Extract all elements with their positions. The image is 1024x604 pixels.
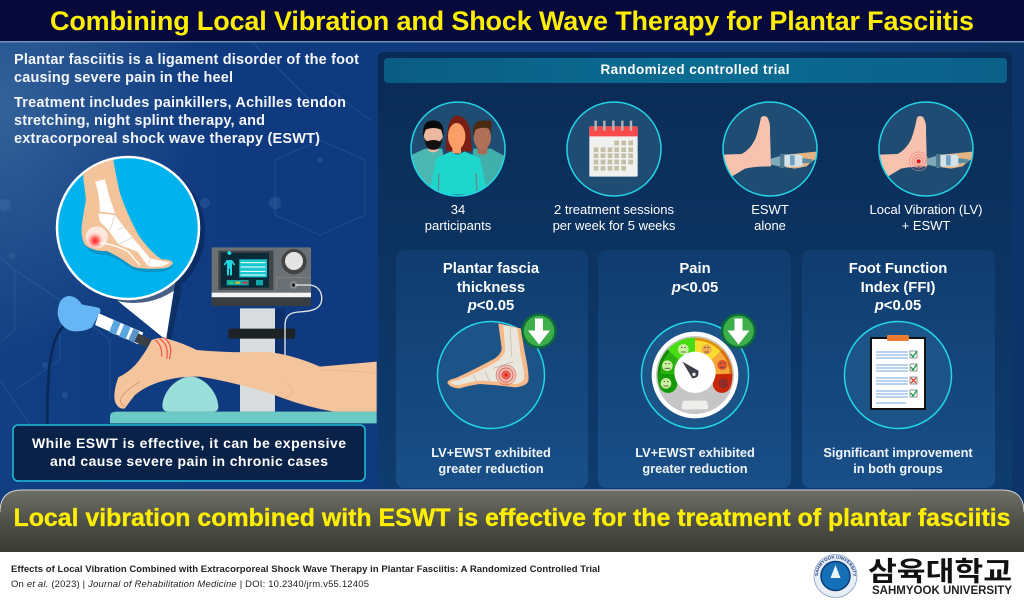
label: per week for 5 weeks	[553, 218, 676, 233]
icon: LV + ESWT foot	[876, 102, 974, 196]
heading	[849, 261, 947, 314]
citation: On et al. (2023) | Journal of Rehabilitation Medicine | DOI: 10.2340/jrm.v55.12405	[11, 579, 369, 590]
heading: p<0.05	[467, 298, 514, 314]
heading bar: Randomized controlled trial	[600, 62, 790, 77]
intro text: causing severe pain in the heel	[14, 70, 233, 86]
heading bar	[384, 58, 1007, 83]
caption	[823, 445, 973, 476]
title bar	[0, 0, 1024, 42]
heading: Foot Function	[849, 261, 947, 277]
icon: magnified heel	[57, 157, 205, 303]
heading	[671, 261, 718, 296]
platform	[110, 412, 377, 423]
caption: greater reduction	[642, 461, 748, 476]
panel: pain	[598, 250, 791, 488]
intro text	[14, 52, 359, 147]
illustration: shock wave treatment scene	[47, 157, 377, 423]
intro text: stretching, night splint therapy, and	[14, 113, 265, 129]
icon: down arrow	[722, 314, 755, 348]
icon: clipboard	[844, 322, 952, 428]
icon: pain gauge	[642, 322, 748, 428]
caption: LV+EWST exhibited	[635, 445, 755, 460]
label: 2 treatment sessions	[554, 202, 674, 217]
conclusion text: Local vibration combined with ESWT is effective for the treatment of plantar fasciitis	[14, 504, 1010, 532]
caption: Significant improvement	[823, 445, 973, 460]
citation	[11, 564, 600, 590]
conclusion banner	[0, 490, 1024, 552]
heading: p<0.05	[671, 280, 718, 296]
icon: university logo: SAHMYOOK UNIVERSITY	[814, 555, 856, 576]
university name: SAHMYOOK UNIVERSITY	[872, 585, 1012, 597]
label: 34	[451, 202, 465, 217]
label: ESWT	[751, 202, 789, 217]
citation: Effects of Local Vibration Combined with Extracorporeal Shock Wave Therapy in Plantar Fasciitis: A Randomized Controlled Trial	[11, 564, 600, 575]
label: + ESWT	[902, 218, 950, 233]
heading: Plantar fascia	[443, 261, 540, 277]
intro text: extracorporeal shock wave therapy (ESWT)	[14, 131, 320, 147]
icon: magnifier pointer	[117, 283, 182, 342]
icon: calendar	[567, 102, 661, 196]
university name: 삼육대학교	[868, 557, 1012, 587]
handpiece	[58, 296, 171, 359]
icon: cable	[47, 323, 67, 423]
callout: and cause severe pain in chronic cases	[50, 453, 328, 469]
university name	[868, 557, 1012, 597]
label: Local Vibration (LV)	[870, 202, 982, 217]
icon: ESWT foot	[720, 102, 818, 196]
heading: thickness	[457, 280, 525, 296]
leg	[114, 338, 377, 412]
icon: university logo	[814, 554, 858, 598]
footer	[0, 552, 1024, 604]
panel: randomized controlled trial	[378, 52, 1012, 488]
panel: foot function index	[802, 250, 995, 488]
caption	[635, 445, 755, 476]
label: alone	[754, 218, 786, 233]
caption: LV+EWST exhibited	[431, 445, 551, 460]
icon: down arrow	[522, 314, 556, 348]
caption: in both groups	[853, 461, 943, 476]
caption	[431, 445, 551, 476]
heading: p<0.05	[874, 298, 921, 314]
intro text: Plantar fasciitis is a ligament disorder of the foot	[14, 52, 359, 68]
callout	[13, 425, 365, 481]
label: participants	[425, 218, 492, 233]
intro text: Treatment includes painkillers, Achilles tendon	[14, 95, 346, 111]
panel: plantar fascia thickness	[396, 250, 588, 488]
icon: foot with pain	[438, 322, 544, 428]
icon: therapy machine	[212, 247, 322, 412]
heading: Pain	[679, 261, 711, 277]
caption: greater reduction	[438, 461, 544, 476]
heading	[443, 261, 540, 314]
icon: participants	[408, 102, 505, 196]
callout: While ESWT is effective, it can be expensive	[32, 435, 346, 451]
title: Combining Local Vibration and Shock Wave Therapy for Plantar Fasciitis	[50, 6, 974, 36]
cushion	[162, 377, 218, 412]
heading: Index (FFI)	[861, 280, 935, 296]
